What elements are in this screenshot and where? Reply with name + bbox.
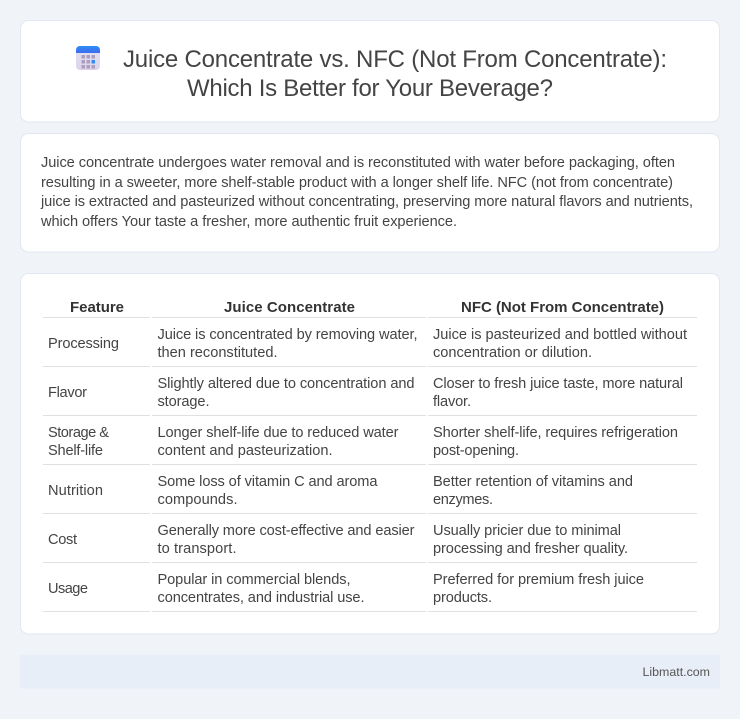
- row: usage: products.: [433, 590, 492, 606]
- row: processing: Juice is concentrated by removing water,: [158, 327, 418, 343]
- row: storage and shelf-life: Shelf-life: [48, 443, 103, 459]
- table header row: Juice Concentrate: [224, 299, 355, 316]
- title: [123, 46, 667, 102]
- intro paragraph: [40, 155, 693, 230]
- panel: comparison table: [20, 274, 720, 634]
- row: usage: Usage: [48, 581, 88, 597]
- row: nutrition: enzymes.: [433, 492, 493, 508]
- intro paragraph: which offers Your taste a fresher, more authentic fruit experience.: [40, 214, 457, 230]
- row: nutrition: Some loss of vitamin C and aroma: [158, 474, 378, 490]
- row: storage and shelf-life: Longer shelf-life due to reduced water: [158, 425, 399, 441]
- row: storage and shelf-life: content and pasteurization.: [158, 443, 332, 459]
- row: nutrition: Nutrition: [48, 483, 103, 499]
- row: usage: Preferred for premium fresh juice: [433, 572, 644, 588]
- row: processing: Processing: [48, 336, 119, 352]
- title: Which Is Better for Your Beverage?: [187, 75, 553, 102]
- row: nutrition: compounds.: [158, 492, 238, 508]
- row: flavor: [43, 376, 697, 416]
- row: cost: Generally more cost-effective and easier: [158, 523, 415, 539]
- row: processing: [43, 327, 697, 367]
- footer: Libmatt.com: [642, 665, 710, 679]
- footer: [20, 655, 720, 688]
- intro paragraph: Juice concentrate undergoes water removal and is reconstituted with water before packaging, often: [41, 155, 675, 171]
- row: cost: Cost: [48, 532, 77, 548]
- table header row: NFC (Not From Concentrate): [461, 299, 664, 316]
- title: Juice Concentrate vs. NFC (Not From Concentrate):: [123, 46, 667, 73]
- row: storage and shelf-life: post-opening.: [433, 443, 519, 459]
- row: usage: [43, 572, 697, 612]
- row: nutrition: Better retention of vitamins and: [433, 474, 633, 490]
- row: storage and shelf-life: Shorter shelf-life, requires refrigeration: [433, 425, 678, 441]
- panel: intro text: [20, 134, 720, 252]
- row: cost: [43, 523, 697, 563]
- row: flavor: flavor.: [433, 394, 471, 410]
- intro paragraph: juice is extracted and pasteurized without concentrating, preserving more natural flavors and nutrients,: [40, 194, 693, 210]
- row: processing: Juice is pasteurized and bottled without: [433, 327, 687, 343]
- table header row: [43, 299, 697, 318]
- intro paragraph: resulting in a sweeter, more shelf-stable product with a longer shelf life. NFC (not from concentrate): [41, 175, 673, 191]
- row: processing: concentration or dilution.: [433, 345, 592, 361]
- row: usage: Popular in commercial blends,: [158, 572, 350, 588]
- row: flavor: Slightly altered due to concentration and: [158, 376, 414, 392]
- row: storage and shelf-life: [43, 425, 697, 465]
- row: cost: processing and fresher quality.: [433, 541, 628, 557]
- row: flavor: storage.: [158, 394, 210, 410]
- icon: calendar: [76, 46, 100, 70]
- row: flavor: Closer to fresh juice taste, more natural: [433, 376, 683, 392]
- row: flavor: Flavor: [48, 385, 87, 401]
- row: nutrition: [43, 474, 697, 514]
- panel: header: [20, 20, 720, 122]
- row: cost: Usually pricier due to minimal: [433, 523, 621, 539]
- row: storage and shelf-life: Storage &: [48, 425, 109, 441]
- row: cost: to transport.: [158, 541, 236, 557]
- row: usage: concentrates, and industrial use.: [158, 590, 364, 606]
- table header row: Feature: [70, 299, 124, 316]
- row: processing: then reconstituted.: [158, 345, 278, 361]
